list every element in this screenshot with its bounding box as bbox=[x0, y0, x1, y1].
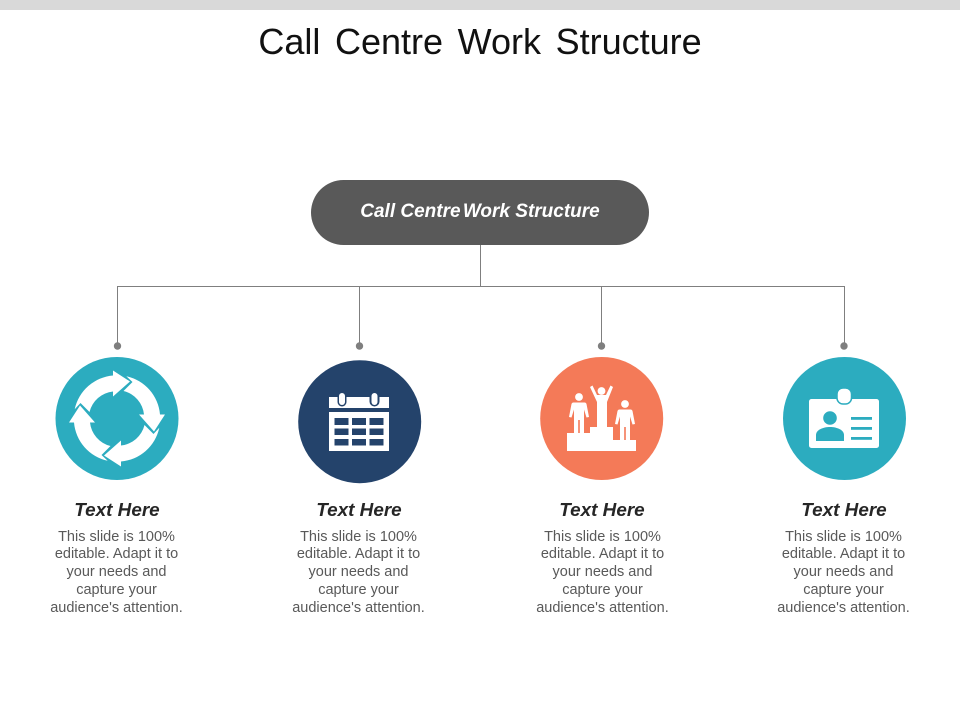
text block 2: capture your bbox=[318, 582, 399, 598]
heading 4: Text Here bbox=[801, 500, 887, 520]
text block 1: your needs and bbox=[67, 564, 166, 580]
text block 1: capture your bbox=[76, 582, 157, 598]
heading 2: Text Here bbox=[316, 500, 402, 520]
text block 3: your needs and bbox=[553, 564, 652, 580]
icon: cycle arrows bbox=[56, 357, 178, 480]
text block 4: editable. Adapt it to bbox=[782, 546, 905, 562]
text block 1: editable. Adapt it to bbox=[55, 546, 178, 562]
text block 4: audience's attention. bbox=[777, 600, 910, 616]
heading 1: Text Here bbox=[74, 500, 160, 520]
text block 4: This slide is 100% bbox=[785, 528, 902, 544]
text block 1 bbox=[50, 528, 183, 616]
icon: podium with three people bbox=[540, 357, 664, 480]
text block 3 bbox=[536, 528, 669, 616]
text block 3: audience's attention. bbox=[536, 600, 669, 616]
icon: calendar bbox=[298, 360, 422, 484]
heading 3: Text Here bbox=[559, 500, 645, 520]
text block 4 bbox=[777, 528, 910, 616]
text block 1: audience's attention. bbox=[50, 600, 183, 616]
text block 2 bbox=[292, 528, 425, 616]
text block 1: This slide is 100% bbox=[58, 528, 175, 544]
text block 3: capture your bbox=[562, 582, 643, 598]
text block 2: editable. Adapt it to bbox=[297, 546, 420, 562]
title: Call Centre Work Structure bbox=[258, 21, 702, 62]
text block 2: This slide is 100% bbox=[300, 528, 417, 544]
central pill: main topic: Call Centre Work Structure bbox=[360, 201, 600, 222]
text block 3: editable. Adapt it to bbox=[541, 546, 664, 562]
text block 2: your needs and bbox=[309, 564, 408, 580]
text block 4: capture your bbox=[803, 582, 884, 598]
text block 3: This slide is 100% bbox=[544, 528, 661, 544]
top bar bbox=[0, 0, 960, 10]
icon: ID badge bbox=[783, 357, 906, 480]
central pill: main topic bbox=[311, 180, 649, 245]
text block 2: audience's attention. bbox=[292, 600, 425, 616]
text block 4: your needs and bbox=[794, 564, 893, 580]
